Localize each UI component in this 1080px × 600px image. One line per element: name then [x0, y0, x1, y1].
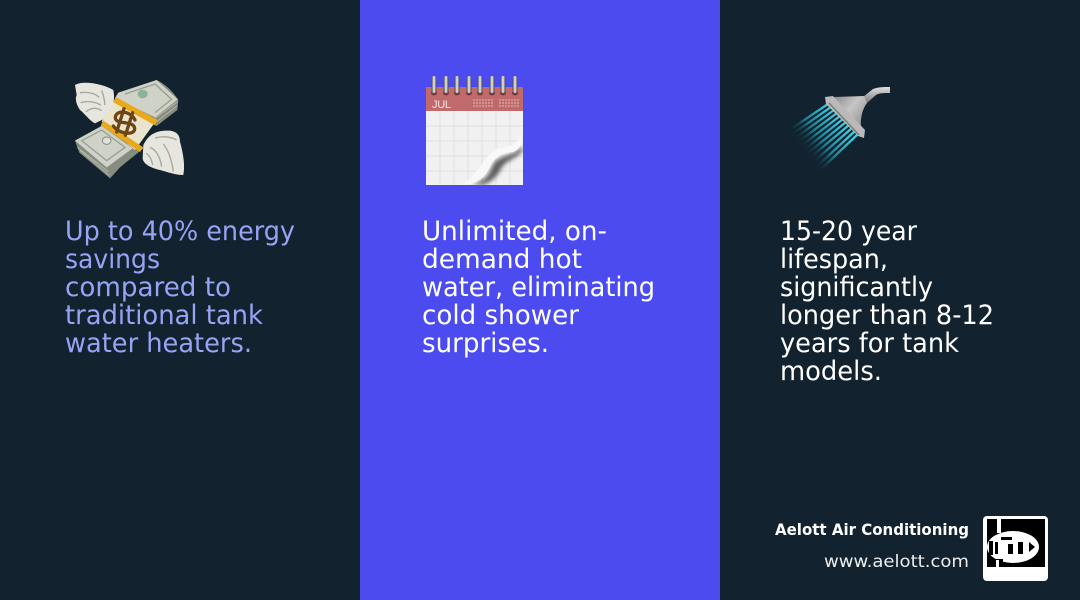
text: energy savings: water heaters. — [65, 328, 252, 359]
icon: spiral calendar — [426, 76, 523, 185]
text: energy savings — [65, 216, 295, 359]
text: on-demand hot water: demand hot — [422, 244, 582, 275]
text: lifespan: significantly — [780, 272, 933, 303]
text: lifespan: longer than 8-12 — [780, 300, 994, 331]
text: lifespan — [780, 216, 994, 387]
text: energy savings: Up to 40% energy — [65, 216, 295, 247]
text: on-demand hot water: cold shower — [422, 300, 580, 331]
panel: center background — [360, 0, 720, 600]
text: energy savings: compared to — [65, 272, 231, 303]
text: energy savings: savings — [65, 244, 160, 275]
icon: company logo — [983, 516, 1048, 581]
text: on-demand hot water: water, eliminating — [422, 272, 655, 303]
icon: shower head — [785, 87, 890, 172]
text: lifespan: lifespan, — [780, 244, 888, 275]
icon: money with wings — [75, 80, 184, 178]
text: website: www.aelott.com — [824, 552, 969, 572]
icon: spiral calendar: JUL — [432, 99, 451, 111]
text: lifespan: 15-20 year — [780, 216, 918, 247]
text: on-demand hot water: Unlimited, on- — [422, 216, 607, 247]
panel: left background — [0, 0, 360, 600]
text: company name: Aelott Air Conditioning — [775, 520, 969, 539]
text: lifespan: years for tank — [780, 328, 959, 359]
text: lifespan: models. — [780, 356, 882, 387]
text: on-demand hot water: surprises. — [422, 328, 549, 359]
text: on-demand hot water — [422, 216, 655, 359]
panel: right background — [720, 0, 1080, 600]
text: energy savings: traditional tank — [65, 300, 263, 331]
